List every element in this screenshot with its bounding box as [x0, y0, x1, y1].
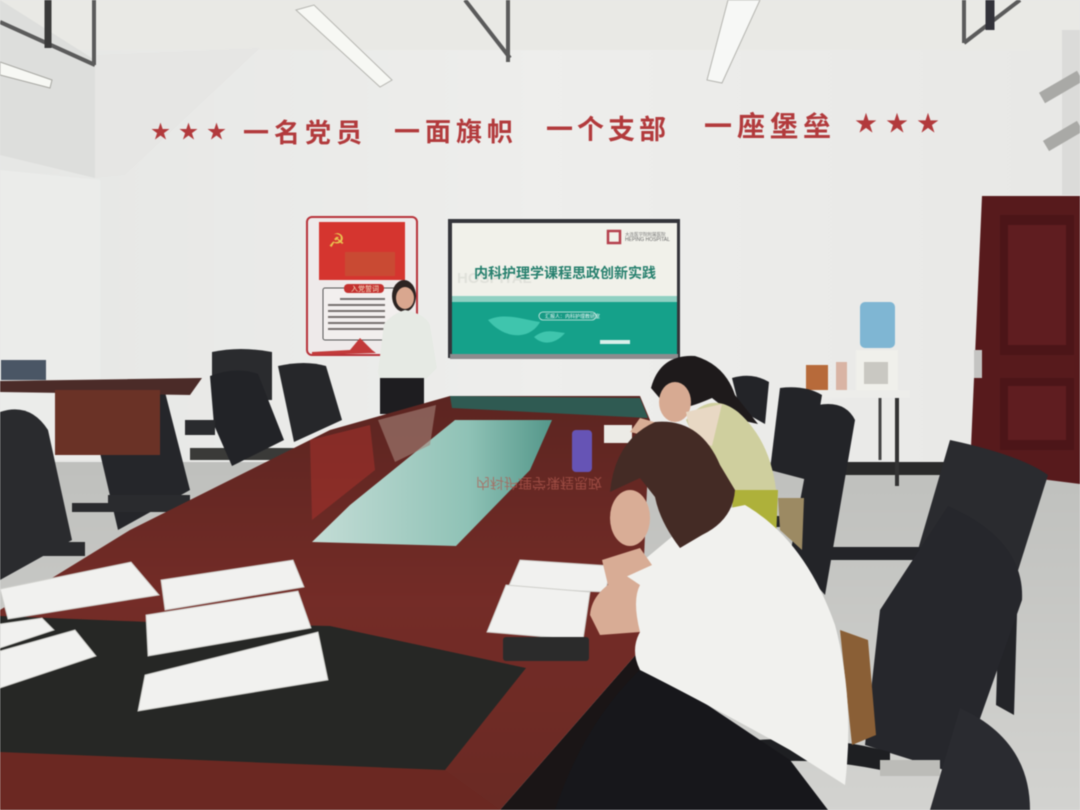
screen on wall: [448, 219, 680, 359]
arms: [590, 575, 640, 635]
screen on wall: 汇报人：内科护理教研室: [545, 313, 600, 320]
party poster: [307, 217, 417, 355]
front chair: [865, 506, 1022, 775]
ceiling lights and rails: [0, 0, 1080, 146]
side desk left: [0, 378, 202, 455]
conference table: [0, 396, 650, 810]
presenter: [378, 280, 437, 414]
party poster: 入党誓词: [351, 284, 379, 293]
hospital name: 大连医学院附属医院: [625, 231, 666, 238]
conference table: 内科护理学课程思政: [476, 475, 602, 491]
screen title: 内科护理学课程思政创新实践: [474, 265, 656, 281]
slogan phrase 1: 一名党员: [243, 118, 367, 148]
water dispenser and side table: [806, 302, 910, 486]
left stars: ★★★: [151, 122, 235, 143]
slogan phrase 3: 一个支部: [546, 115, 670, 145]
wall slogan: [151, 111, 948, 148]
slogan phrase 2: 一面旗帜: [394, 117, 518, 147]
right back chairs: [732, 376, 1048, 715]
seated woman at front: [555, 422, 1030, 810]
fish decoration: [488, 317, 540, 335]
slogan phrase 4: 一座堡垒: [704, 111, 836, 142]
right stars: ★★★: [855, 111, 948, 136]
door: [970, 196, 1080, 484]
black table inlay: [0, 616, 526, 770]
white blouse: [620, 505, 848, 785]
screen on wall: HEPING HOSPITAL: [625, 237, 670, 243]
papers on table: [0, 560, 612, 711]
back left chairs: [0, 349, 342, 580]
seated woman at back: [630, 356, 804, 550]
dark trousers: [555, 665, 828, 810]
icon: hammer and sickle: ☭: [328, 231, 345, 252]
phone and cup on table: [503, 425, 632, 661]
screen ghost text: HOSPITAL: [457, 270, 532, 287]
head and hair: [610, 490, 650, 546]
icon: hospital logo: [608, 231, 620, 243]
glass inlay: [312, 420, 552, 546]
presenter pill: [539, 312, 596, 320]
